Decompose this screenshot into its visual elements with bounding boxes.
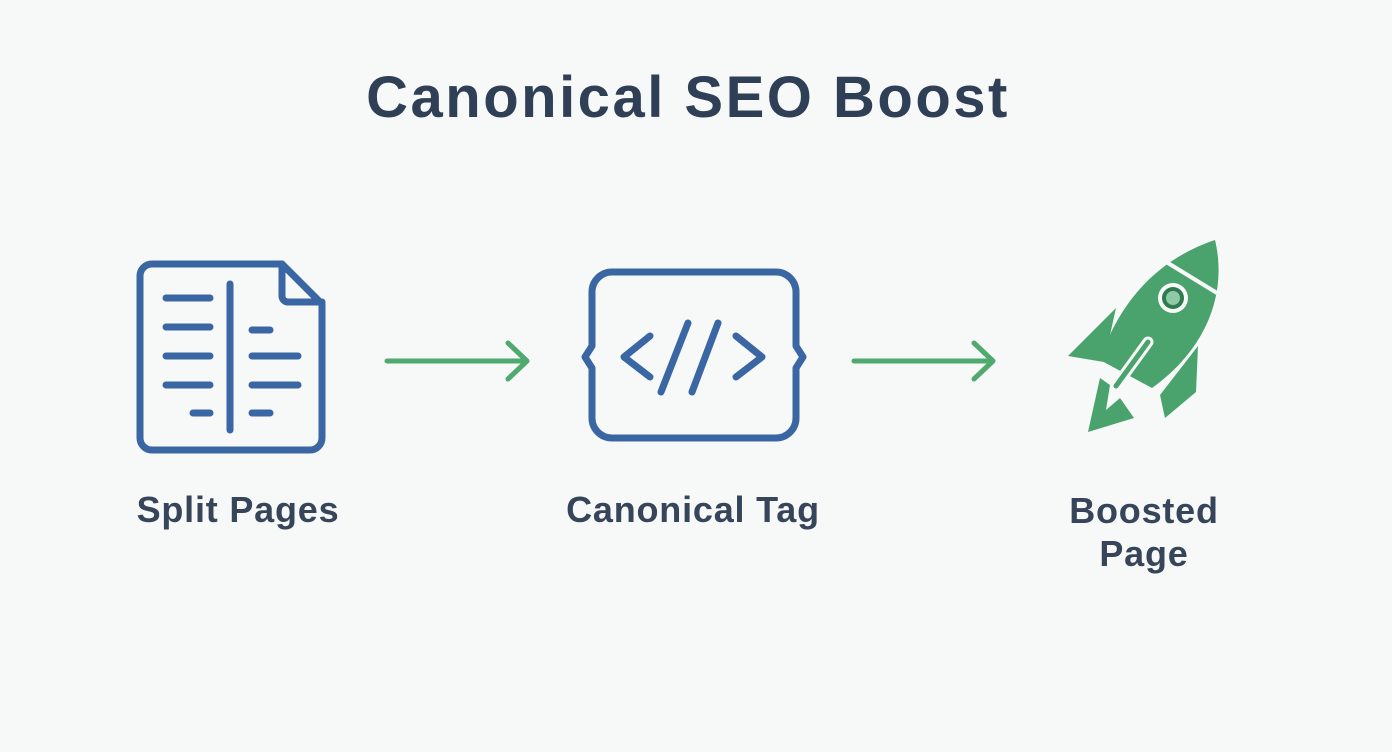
title: Canonical SEO Boost [366,65,1010,130]
label: boosted page: Boosted [1069,490,1219,531]
label: boosted page [1069,490,1219,574]
arrow 1 [387,343,527,379]
icon: split document [140,264,322,450]
arrow 2 [854,343,993,379]
label: canonical tag: Canonical Tag [566,489,820,530]
label: split pages: Split Pages [137,489,339,530]
icon: rocket [1068,240,1219,432]
label: boosted page: Page [1099,533,1189,574]
icon: code tag [585,272,803,438]
